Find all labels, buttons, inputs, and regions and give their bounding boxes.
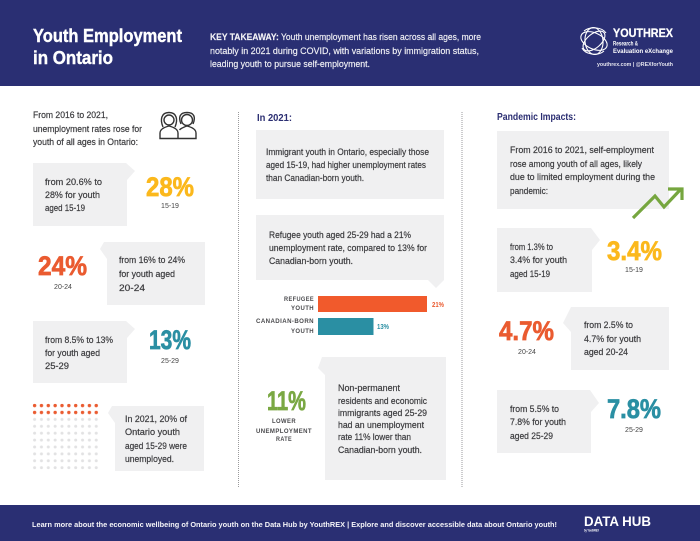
text box: immigrant youth [256, 130, 444, 199]
stat: 4.7%: 20-24 [518, 349, 536, 356]
YouthREX logo text: Research & [613, 40, 638, 48]
callout: 25-29 self-employment [497, 390, 599, 453]
callout: 25-29 self-employment: aged 25-29 [510, 431, 553, 441]
stat: 11% lower: LOWER [272, 419, 296, 425]
callout: 15-19 unemployment: from 20.6% to [45, 177, 102, 187]
callout: 25-29 unemployment [33, 321, 135, 383]
YouthREX logo text: YOUTHREX [613, 26, 673, 40]
text box: immigrant youth: Immigrant youth in Ontario, especially those [266, 147, 429, 157]
YouthREX logo text [597, 26, 673, 68]
title: in Ontario [33, 47, 113, 68]
key takeaway [210, 32, 481, 69]
key takeaway: notably in 2021 during COVID, with variations by immigration status, [210, 46, 479, 56]
stat: 24%: 24% [38, 251, 87, 281]
callout: 25-29 unemployment: from 8.5% to 13% [45, 335, 113, 345]
callout: 25-29 unemployment: for youth aged [45, 348, 100, 358]
bar: Canadian-born: YOUTH [291, 329, 314, 335]
callout: 20% unemployed [108, 406, 204, 471]
callout: 20-24 unemployment: from 16% to 24% [119, 255, 185, 265]
text box: self-employment: pandemic: [510, 186, 548, 196]
stat: 4.7%: 4.7% [499, 316, 554, 346]
bar: refugee [284, 296, 444, 312]
callout: 20% unemployed: In 2021, 20% of [125, 414, 187, 424]
stat: 13% [149, 325, 191, 365]
callout: 20% unemployed: unemployed. [125, 454, 174, 464]
stat: 13%: 13% [149, 325, 191, 355]
stat: 11% lower: 11% [267, 386, 306, 416]
title [33, 25, 182, 68]
callout: refugee youth [256, 215, 444, 288]
icon: rising trend arrow [633, 189, 682, 218]
callout: refugee youth: unemployment rate, compared to 13% for [269, 243, 427, 253]
heading: Pandemic Impacts: Pandemic Impacts: [497, 112, 576, 123]
stat: 11% lower: UNEMPLOYMENT [256, 429, 312, 435]
callout: 20-24 unemployment [100, 242, 205, 305]
bar: Canadian-born [256, 318, 389, 335]
stat: 11% lower [256, 386, 312, 443]
stat: 24%: 20-24 [54, 284, 72, 291]
Data Hub logo: DATA HUB [584, 513, 651, 529]
callout: 15-19 unemployment: 28% for youth [45, 190, 100, 200]
icon: YouthREX logo swirl [578, 27, 610, 55]
callout: 20-24 unemployment: 20-24 [119, 283, 145, 293]
stat: 13%: 25-29 [161, 358, 179, 365]
icon: two youth [160, 112, 196, 138]
stat: 7.8% [607, 394, 661, 434]
text box: self-employment: rose among youth of all ages, likely [510, 159, 642, 169]
text box: self-employment: From 2016 to 2021, self-employment [510, 145, 654, 155]
callout: 20-24 self-employment: 4.7% for youth [584, 334, 641, 344]
callout: 25-29 unemployment: 25-29 [45, 361, 69, 371]
header banner [0, 0, 700, 86]
callout: non-permanent residents: immigrants aged 25-29 [338, 408, 427, 418]
bar: Canadian-born: CANADIAN-BORN [256, 319, 314, 325]
callout: non-permanent residents: rate 11% lower than [338, 432, 411, 442]
callout: 15-19 self-employment: aged 15-19 [510, 269, 550, 279]
callout: 20% unemployed: Ontario youth [125, 427, 180, 437]
callout: non-permanent residents [318, 357, 446, 480]
callout: 25-29 self-employment: from 5.5% to [510, 404, 559, 414]
stat: 7.8%: 7.8% [607, 394, 661, 424]
callout: 15-19 unemployment [33, 163, 135, 226]
left intro text: From 2016 to 2021, [33, 110, 108, 120]
callout: non-permanent residents: had an unemployment [338, 420, 424, 430]
stat: 4.7% [499, 316, 554, 356]
stat: 24% [38, 251, 87, 291]
callout: 20-24 self-employment [563, 307, 669, 370]
callout: 20-24 self-employment: aged 20-24 [584, 347, 628, 357]
footer banner [0, 505, 700, 541]
callout: 15-19 self-employment: from 1.3% to [510, 242, 553, 252]
heading: In 2021: In 2021: [257, 113, 292, 124]
stat: 11% lower: RATE [276, 437, 292, 443]
stat: 7.8%: 25-29 [625, 427, 643, 434]
callout: 20% unemployed: aged 15-29 were [125, 441, 187, 451]
text box: self-employment [497, 131, 669, 209]
callout: refugee youth: Canadian-born youth. [269, 256, 353, 266]
callout: non-permanent residents: residents and economic [338, 396, 427, 406]
key takeaway: KEY TAKEAWAY: Youth unemployment has risen across all ages, more [210, 32, 481, 42]
Data Hub logo: by YouthREX [584, 528, 599, 532]
callout: refugee youth: Refugee youth aged 25-29 had a 21% [269, 230, 411, 240]
callout: 20-24 self-employment: from 2.5% to [584, 320, 633, 330]
column dividers [238, 112, 462, 488]
text box: self-employment: due to limited employment during the [510, 172, 655, 182]
dot chart: 20 of 100 [32, 403, 100, 472]
stat: 28%: 15-19 [161, 203, 179, 210]
text box: immigrant youth: than Canadian-born youth. [266, 173, 364, 183]
left intro text: unemployment rates rose for [33, 124, 142, 134]
YouthREX logo text: Evaluation eXchange [613, 48, 673, 55]
callout: 25-29 self-employment: 7.8% for youth [510, 417, 566, 427]
callout: 15-19 self-employment [497, 228, 600, 292]
bar: refugee: YOUTH [291, 306, 314, 312]
bar: Canadian-born: 13% [377, 322, 389, 331]
text box: immigrant youth: aged 15-19, had higher unemployment rates [266, 160, 426, 170]
callout: non-permanent residents: Non-permanent [338, 383, 400, 393]
left intro text: youth of all ages in Ontario: [33, 137, 138, 147]
key takeaway: leading youth to pursue self-employment. [210, 59, 370, 69]
bar: refugee: REFUGEE [284, 297, 314, 303]
left intro text [33, 110, 142, 147]
bar chart: refugee vs Canadian-born [256, 296, 444, 335]
title: Youth Employment [33, 25, 182, 46]
callout: non-permanent residents: Canadian-born youth. [338, 445, 422, 455]
stat: 3.4%: 15-19 [625, 267, 643, 274]
footer text: Learn more about the economic wellbeing of Ontario youth on the Data Hub by YouthREX | Explore and discover accessible data about Ontario youth! [32, 520, 557, 529]
stat: 28%: 28% [146, 172, 194, 202]
bar: refugee: 21% [432, 300, 444, 309]
stat: 3.4%: 3.4% [607, 236, 662, 266]
callout: 15-19 self-employment: 3.4% for youth [510, 255, 567, 265]
callout: 20-24 unemployment: for youth aged [119, 269, 175, 279]
callout: 15-19 unemployment: aged 15-19 [45, 203, 85, 213]
YouthREX logo text: youthrex.com | @REXforYouth [597, 62, 673, 68]
